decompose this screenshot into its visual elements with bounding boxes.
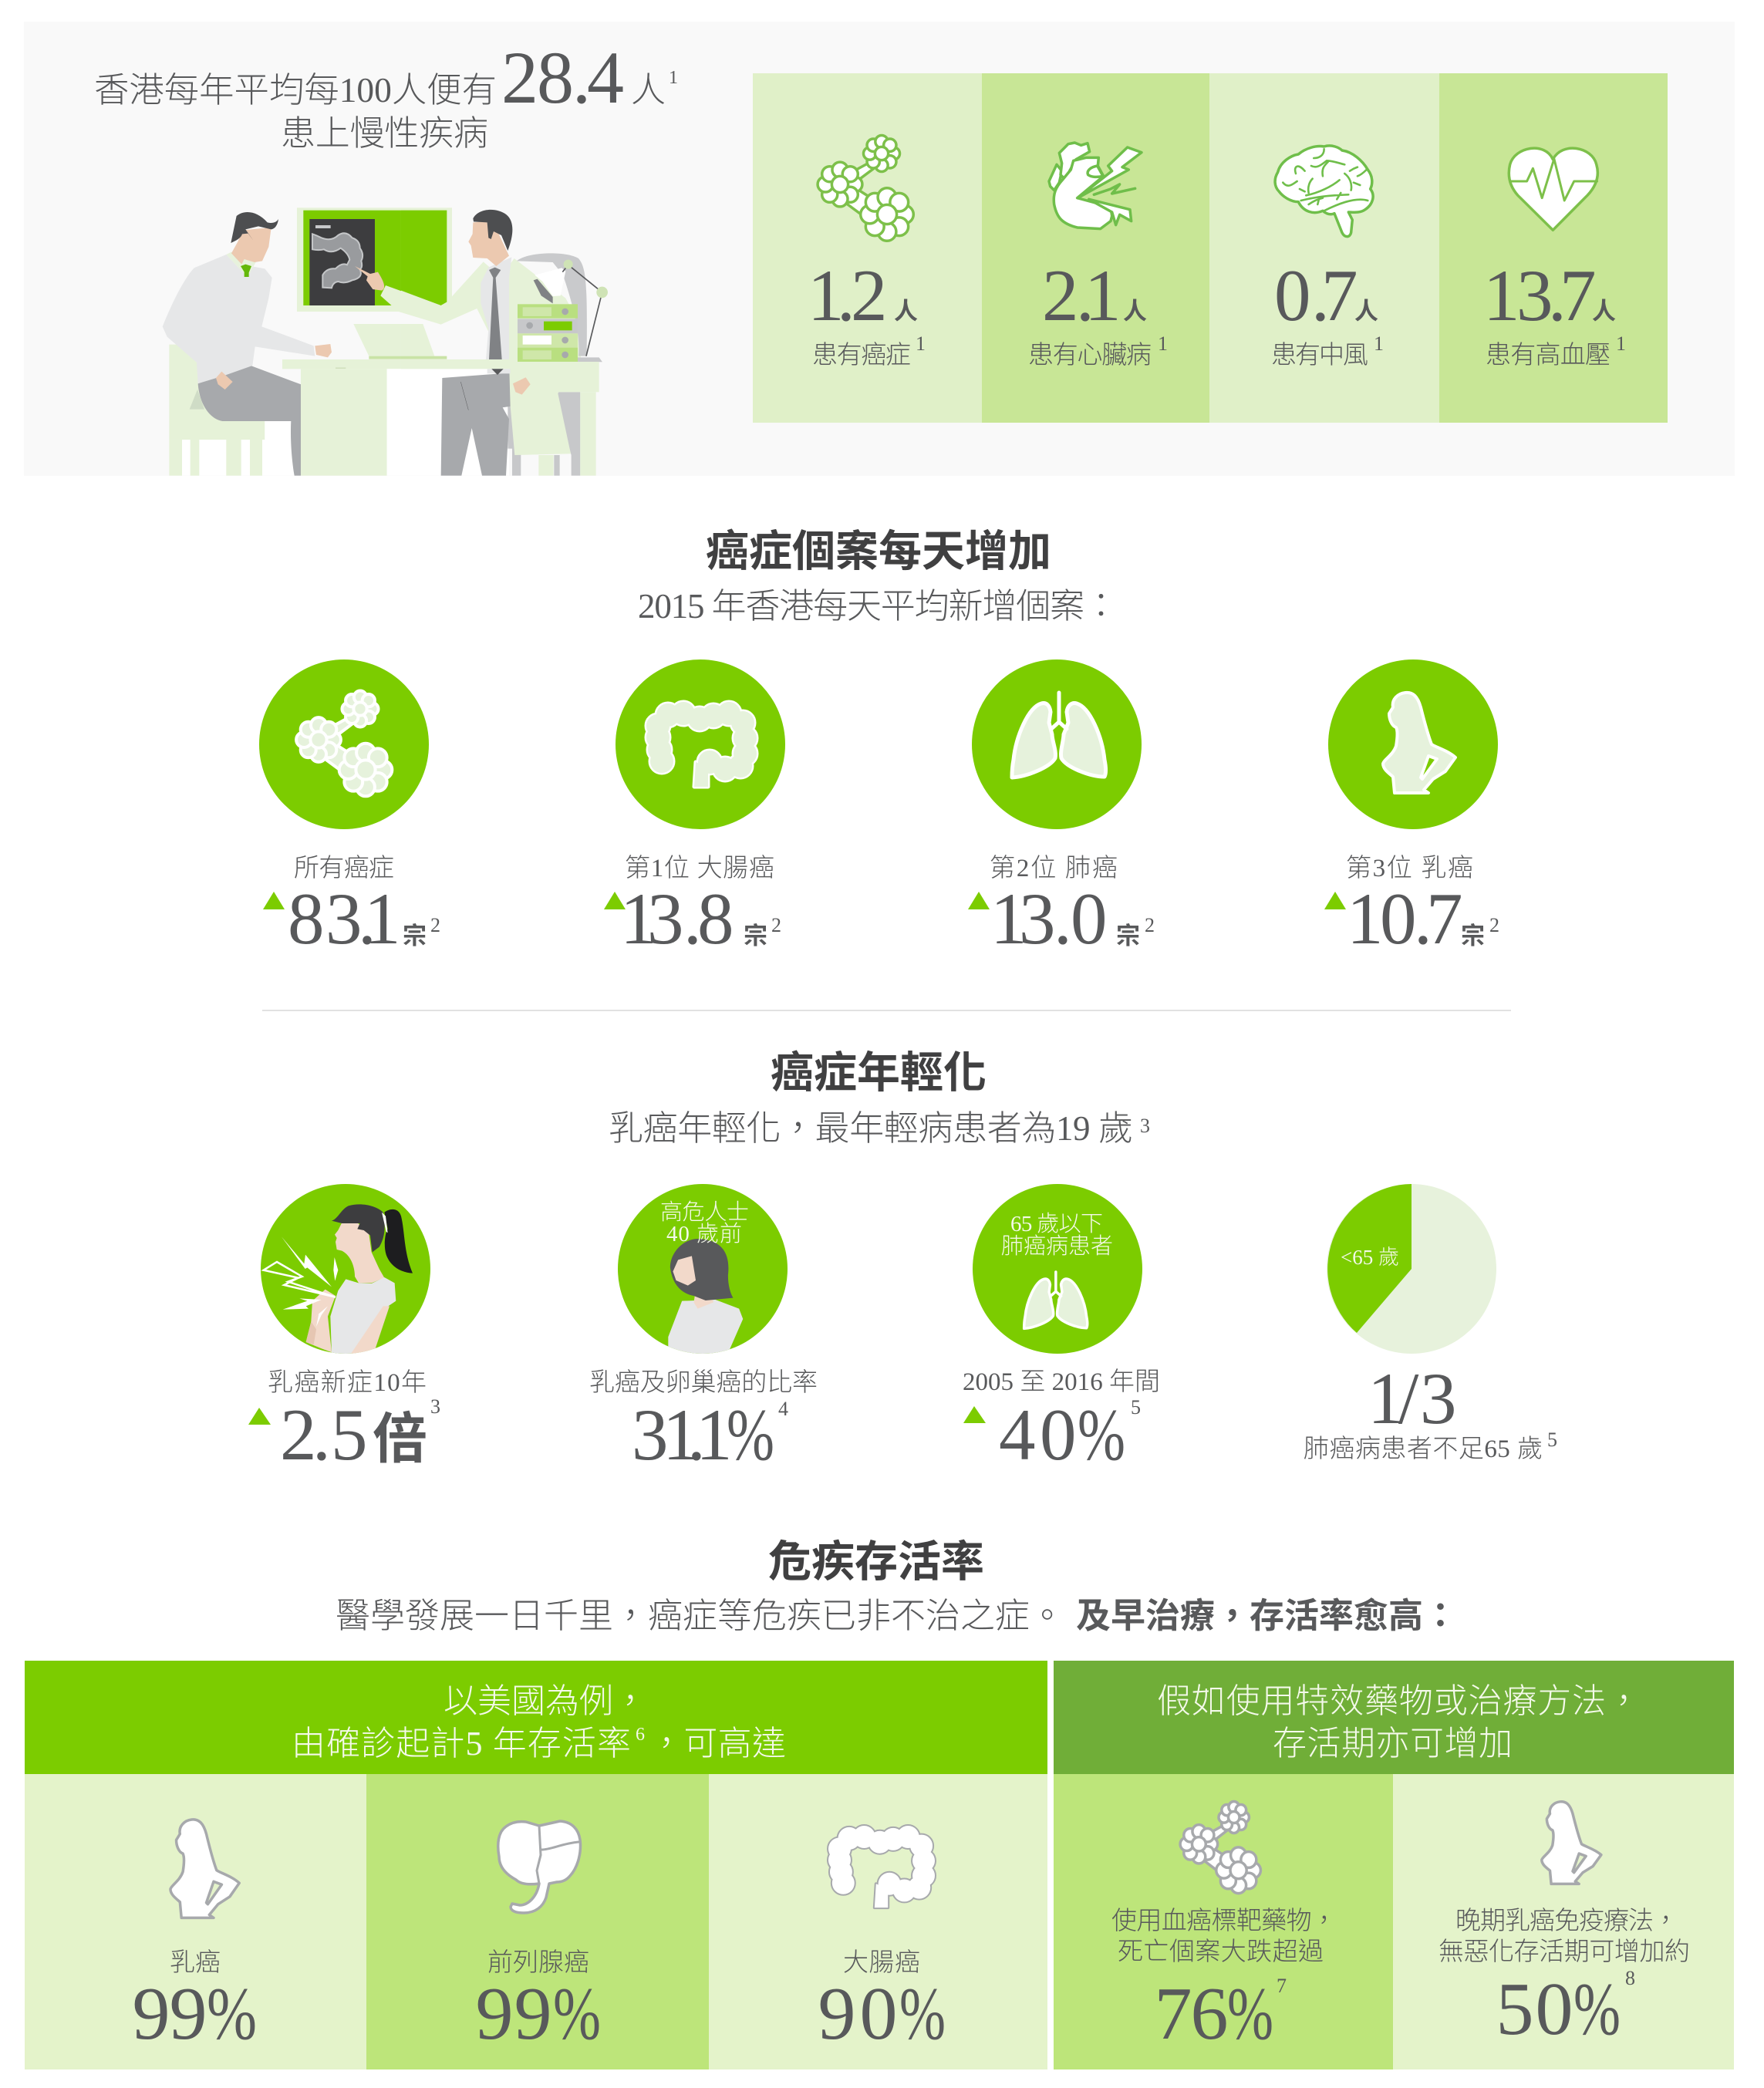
panel: chronic disease overview [24,22,1735,476]
pie chart: <65 歲 [1341,1246,1399,1269]
furniture legs behind coat [508,392,596,476]
cell: prostate cancer 99%: 前列腺癌 [487,1948,589,1977]
doctor hand pointing [355,266,384,291]
icon: heart with lightning [1049,143,1142,229]
stat: new breast cancer cases 2.5x: 3 [430,1395,440,1418]
cell: blood cancer targeted drugs 76% [1054,1774,1393,2069]
desk top and doctor hand [401,359,599,395]
stat: breast cancer: 宗 [1461,923,1485,950]
subheading: early treatment raises survival: 醫學發展一日千里，癌症等危疾已非不治之症。 [336,1597,1064,1635]
stat: lung cancer: 2 [1145,914,1155,936]
stat: new breast cancer cases 2.5x: 倍 [373,1410,427,1470]
subheading: early treatment raises survival [336,1597,1458,1635]
patient figure [163,212,332,476]
stat: one third of lung patients under 65: 5 [1547,1429,1557,1451]
stat: lung cancer under 65 up 40%: 2005 至 2016 年間 [963,1368,1160,1396]
stat: breast cancer: 第3位 乳癌 [1346,854,1473,882]
cell: prostate cancer 99%: 99 [475,1972,552,2056]
stat: all cancers: 83.1 [288,878,401,960]
cell: breast cancer immunotherapy 50% [1393,1774,1734,2069]
laptop right side [401,324,447,359]
stat card: cancer: 1 [916,332,926,355]
icon: prostate [498,1821,580,1913]
stat card: hypertension: 人 [1592,298,1616,325]
stat: breast and ovarian cancer ratio: 乳癌及卵巢癌的比率 [589,1368,818,1397]
stat card: stroke [1209,73,1439,423]
subheading: daily cases 2015: 2015 年香港每天平均新增個案： [638,587,1118,626]
cell: colorectal cancer 90% [709,1774,1047,2069]
cell: prostate cancer 99% [366,1774,709,2069]
stat: lung cancer under 65 up 40%: % [1078,1394,1125,1476]
stat card: cancer [753,73,982,423]
stat card: hypertension: 13.7 [1483,255,1597,336]
cell: breast cancer immunotherapy 50%: 晚期乳癌免疫療法， [1455,1907,1678,1935]
subheading: youngest patient aged 19: 乳癌年輕化，最年輕病患者為19 歲 [609,1109,1133,1148]
stat: lung cancer under 65 up 40%: 5 [1131,1396,1141,1418]
cell: blood cancer targeted drugs 76%: % [1227,1972,1273,2056]
stat card: cancer: 患有癌症 [812,341,911,369]
illustration: patient, desk and scan monitor [163,207,401,476]
banner: US example: ，可高達 [649,1725,786,1762]
illustration: doctor, lamp and folders [380,207,608,476]
stat: lung cancer under 65 up 40%: 40 [999,1394,1077,1476]
doctor coat, shirt and tie [380,257,581,455]
headline: 28.4 per 100 people: 28.4 [501,36,624,119]
headline: 28.4 per 100 people: 1 [669,68,678,88]
stat: lung cancer [968,659,1155,960]
cell: breast cancer immunotherapy 50%: 無惡化存活期可增加約 [1439,1938,1690,1966]
cell: blood cancer targeted drugs 76%: 7 [1277,1975,1287,1997]
heading: cancer in younger people: 癌症年輕化 [771,1048,987,1097]
stat: breast and ovarian cancer ratio: 4 [778,1398,788,1420]
banner: US example: 以美國為例， [444,1682,647,1720]
cell: breast cancer 99% [25,1774,366,2069]
lamp [517,253,608,362]
subheading: early treatment raises survival: 及早治療，存活率愈高： [1076,1597,1458,1635]
stat: breast cancer: 10.7 [1347,878,1462,960]
cell: breast cancer 99%: % [207,1972,257,2056]
stat: one third of lung patients under 65: 1/3 [1368,1358,1456,1439]
stat: all cancers [259,659,440,960]
cell: colorectal cancer 90%: 90 [818,1972,898,2056]
stat: colorectal cancer: 宗 [744,923,767,950]
doctor head [468,210,512,266]
heading: daily cancer cases: 癌症個案每天增加 [706,527,1051,575]
cell: blood cancer targeted drugs 76%: 使用血癌標靶藥物， [1111,1907,1337,1935]
stat card: hypertension [1439,73,1668,423]
stat: colorectal cancer: 13.8 [620,878,734,960]
stat card: heart disease: 患有心臟病 [1028,342,1152,369]
stat: breast and ovarian cancer ratio: 31.1 [632,1394,733,1476]
stat card: stroke: 0.7 [1274,255,1358,336]
headline: 28.4 per 100 people: 患上慢性疾病 [281,114,488,153]
stat card: hypertension: 患有高血壓 [1486,342,1611,369]
cell: breast cancer immunotherapy 50%: 50 [1496,1968,1573,2051]
icon: cancer cells [818,135,913,241]
headline: 28.4 per 100 people: 人 [631,71,666,110]
monitor right side [401,207,452,312]
cell: colorectal cancer 90%: 大腸癌 [843,1948,920,1977]
cell: blood cancer targeted drugs 76%: 死亡個案大跌超過 [1118,1938,1324,1966]
banner: special treatment [1054,1661,1734,1774]
stat: breast and ovarian cancer ratio [589,1184,818,1476]
pie chart [1327,1184,1496,1354]
stat: new breast cancer cases 2.5x: 2.5 [280,1394,367,1476]
desk and laptop [282,324,401,476]
stat: breast and ovarian cancer ratio: 高危人士 [660,1199,749,1225]
cell: prostate cancer 99%: % [553,1972,601,2056]
heading: critical illness survival: 危疾存活率 [768,1537,984,1586]
stat: breast and ovarian cancer ratio: 40 歲前 [666,1221,742,1246]
panel: 5-year survival in the US [25,1661,1047,2069]
stat: lung cancer: 第2位 肺癌 [990,854,1118,882]
banner: special treatment: 假如使用特效藥物或治療方法， [1157,1682,1641,1720]
stat: all cancers: 2 [430,914,440,936]
subheading: youngest patient aged 19: 3 [1140,1115,1150,1137]
illustration: woman with shoulder length hair [668,1239,743,1355]
headline: 28.4 per 100 people [94,36,678,153]
icon: heart with pulse [1509,148,1597,230]
stat: breast and ovarian cancer ratio: % [727,1394,774,1476]
stat card: heart disease: 2.1 [1042,255,1121,336]
stat card: stroke: 患有中風 [1271,342,1368,369]
stat: lung cancer: 13.0 [990,878,1108,960]
monitor frame and scan [297,207,401,312]
banner: US example: 由確診起計5 年存活率 [292,1725,631,1762]
stat: all cancers: 宗 [403,923,427,950]
stat card: heart disease: 1 [1158,332,1168,355]
stat card: cancer: 1.2 [808,255,887,336]
stat card: heart disease: 人 [1123,298,1147,325]
banner: US example [25,1661,1047,1774]
stat card: stroke: 1 [1374,332,1384,355]
stat: breast cancer: 2 [1489,914,1499,936]
cell: colorectal cancer 90%: % [899,1972,946,2056]
chair [169,320,301,476]
illustration: woman with chest pain [264,1204,413,1354]
stat card: cancer: 人 [894,298,918,325]
cell: breast cancer immunotherapy 50%: % [1573,1968,1621,2051]
headline: 28.4 per 100 people: 香港每年平均每100人便有 [94,71,497,110]
stat: lung cancer under 65 up 40% [963,1184,1160,1476]
stat: lung cancer under 65 up 40%: 65 歲以下 [1010,1211,1103,1236]
stat card: heart disease [982,73,1209,423]
stat: one third of lung patients under 65 [1304,1184,1557,1463]
doctor trousers [441,373,511,476]
stat card: stroke: 人 [1354,298,1378,325]
stat: all cancers: 所有癌症 [294,854,394,882]
folders [518,304,578,362]
stat card: hypertension: 1 [1616,332,1626,355]
stat: colorectal cancer: 2 [771,914,781,936]
cell: breast cancer 99%: 99 [133,1972,207,2056]
banner: US example: 6 [636,1725,645,1745]
stat: lung cancer under 65 up 40%: 肺癌病患者 [1001,1233,1113,1259]
panel: targeted drugs and treatment [1054,1661,1734,2069]
stat: one third of lung patients under 65: 肺癌病患者不足65 歲 [1304,1435,1543,1463]
stat: new breast cancer cases 2.5x: 乳癌新症10年 [268,1368,427,1397]
stat: lung cancer: 宗 [1116,923,1140,950]
stat: breast cancer [1324,659,1499,960]
stat: colorectal cancer: 第1位 大腸癌 [625,854,774,882]
stat: colorectal cancer [604,659,785,960]
stat: new breast cancer cases 2.5x [248,1184,440,1476]
cell: blood cancer targeted drugs 76%: 76 [1154,1972,1228,2056]
cell: breast cancer immunotherapy 50%: 8 [1625,1967,1635,1989]
cell: breast cancer 99%: 乳癌 [170,1948,221,1977]
banner: special treatment: 存活期亦可增加 [1273,1725,1513,1762]
icon: brain [1275,146,1373,237]
